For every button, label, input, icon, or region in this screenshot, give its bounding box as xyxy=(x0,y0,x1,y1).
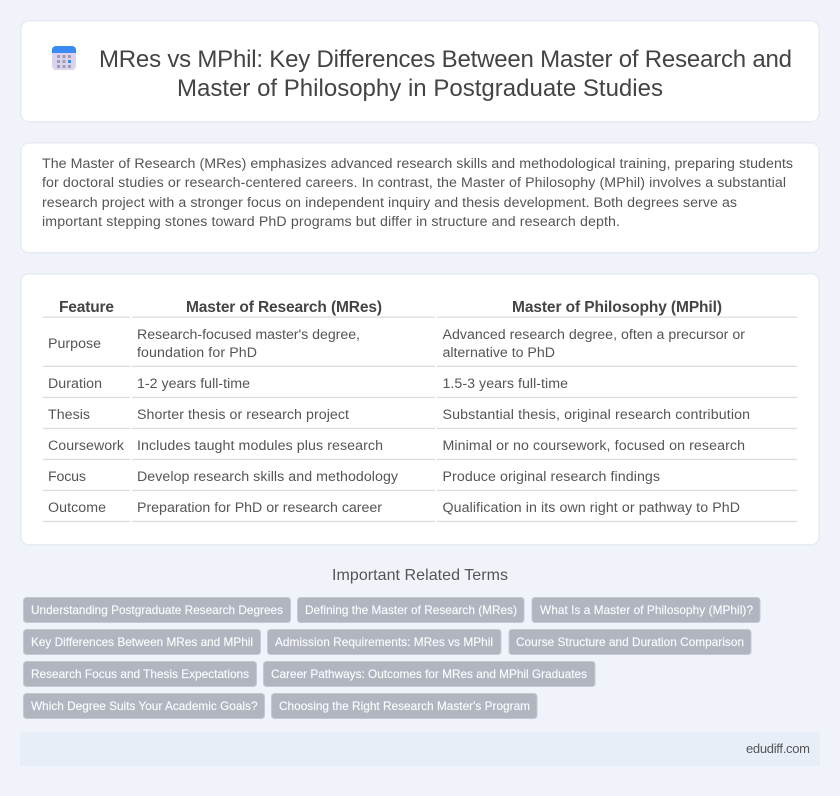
table row: thesis: Substantial thesis, original research contribution xyxy=(442,407,750,423)
tag xyxy=(24,662,256,686)
tag xyxy=(532,598,760,622)
title xyxy=(99,46,792,102)
table row: thesis: Thesis xyxy=(48,407,90,423)
title: MRes vs MPhil: Key Differences Between Master of Research and xyxy=(99,46,792,73)
table header row xyxy=(43,299,797,318)
tag xyxy=(264,662,595,686)
tag: Choosing the Right Research Master's Program xyxy=(279,699,530,713)
table header row: Feature xyxy=(59,299,114,316)
table row: purpose: Advanced research degree, often a precursor or xyxy=(442,327,745,343)
tag xyxy=(272,694,537,718)
panel: header xyxy=(21,21,819,122)
table header row: Master of Philosophy (MPhil) xyxy=(512,299,722,316)
tag: Which Degree Suits Your Academic Goals? xyxy=(31,699,258,713)
footer xyxy=(20,732,820,766)
tag: Research Focus and Thesis Expectations xyxy=(31,667,249,681)
tag xyxy=(24,694,264,718)
text block: introduction xyxy=(42,156,793,230)
title: Master of Philosophy in Postgraduate Studies xyxy=(177,75,663,102)
tag xyxy=(24,630,260,654)
tag xyxy=(268,630,501,654)
table row: duration: 1.5-3 years full-time xyxy=(442,376,568,392)
table row: purpose xyxy=(43,327,797,367)
table header row: Master of Research (MRes) xyxy=(186,299,382,316)
text block: introduction: research project with a stronger focus on independent inquiry and thesis development. Both degrees serve as xyxy=(42,195,737,211)
table row: purpose: Research-focused master's degree, xyxy=(137,327,360,343)
tag: Key Differences Between MRes and MPhil xyxy=(31,635,253,649)
tag: What Is a Master of Philosophy (MPhil)? xyxy=(540,603,753,617)
table row: coursework xyxy=(43,438,797,460)
tag: Defining the Master of Research (MRes) xyxy=(305,603,517,617)
tag: Admission Requirements: MRes vs MPhil xyxy=(275,635,493,649)
table row: focus: Produce original research findings xyxy=(442,469,660,485)
table row: purpose: Purpose xyxy=(48,336,101,352)
table row: duration: 1-2 years full-time xyxy=(137,376,250,392)
tag xyxy=(298,598,524,622)
table row: outcome: Qualification in its own right or pathway to PhD xyxy=(442,500,740,516)
table row: purpose: foundation for PhD xyxy=(137,345,257,361)
text block: introduction: The Master of Research (MRes) emphasizes advanced research skills and methodological training, preparing students xyxy=(42,156,793,172)
table row: coursework: Minimal or no coursework, focused on research xyxy=(442,438,745,454)
table row: purpose: alternative to PhD xyxy=(442,345,555,361)
tag xyxy=(24,598,290,622)
table row: coursework: Coursework xyxy=(48,438,125,454)
table row: duration: Duration xyxy=(48,376,102,392)
table row: outcome xyxy=(43,500,797,522)
table row: focus: Develop research skills and methodology xyxy=(137,469,399,485)
table row: outcome: Preparation for PhD or research career xyxy=(137,500,382,516)
tag xyxy=(509,630,751,654)
panel: related term tags xyxy=(24,598,760,718)
heading: important related terms: Important Related Terms xyxy=(332,567,508,584)
panel: comparison table xyxy=(21,274,819,545)
table row: duration xyxy=(43,376,797,398)
panel: introduction xyxy=(21,143,819,253)
icon: calendar xyxy=(52,46,76,70)
tag: Understanding Postgraduate Research Degrees xyxy=(31,603,283,617)
table row: thesis xyxy=(43,407,797,429)
footer source text: edudiff.com xyxy=(746,741,810,756)
table row: coursework: Includes taught modules plus research xyxy=(137,438,383,454)
table row: thesis: Shorter thesis or research project xyxy=(137,407,349,423)
table row: focus xyxy=(43,469,797,491)
table row: focus: Focus xyxy=(48,469,86,485)
tag: Career Pathways: Outcomes for MRes and MPhil Graduates xyxy=(271,667,587,681)
text block: introduction: for doctoral studies or research-centered careers. In contrast, the Master of Philosophy (MPhil) involves a substantial xyxy=(42,175,786,191)
table row: outcome: Outcome xyxy=(48,500,106,516)
tag: Course Structure and Duration Comparison xyxy=(516,635,744,649)
text block: introduction: important stepping stones toward PhD programs but differ in structure and research depth. xyxy=(42,214,620,230)
